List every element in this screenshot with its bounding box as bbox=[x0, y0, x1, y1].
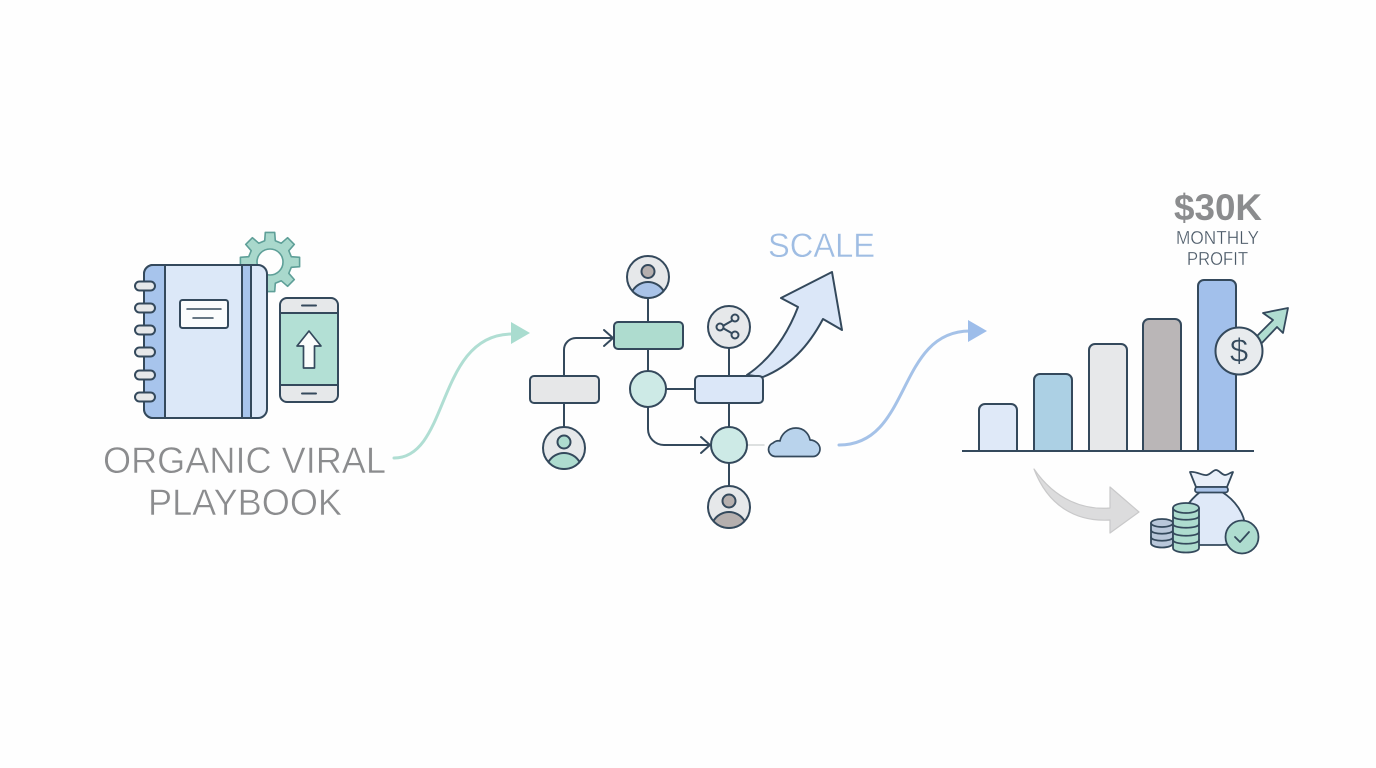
icon: user bottom bbox=[708, 486, 750, 528]
icon: phone with up arrow bbox=[280, 298, 338, 402]
bar 3 bbox=[1089, 344, 1127, 451]
heading: scale: SCALE bbox=[768, 227, 875, 265]
bar 2 bbox=[1034, 374, 1072, 451]
flowchart bbox=[530, 256, 842, 528]
notebook label bbox=[180, 300, 228, 328]
coin stack: small bbox=[1151, 519, 1173, 548]
title: organic viral playbook bbox=[103, 440, 386, 523]
icon: user left bbox=[543, 427, 585, 469]
title: organic viral playbook: PLAYBOOK bbox=[148, 482, 342, 523]
icon: growth arrow bbox=[1256, 308, 1288, 345]
icon: share bbox=[708, 306, 750, 348]
notebook spine bbox=[144, 265, 165, 418]
icon: user top bbox=[627, 256, 669, 298]
stat: 30K monthly profit: PROFIT bbox=[1187, 249, 1248, 269]
flow node: lower circle bbox=[711, 427, 747, 463]
coin stack: large bbox=[1173, 503, 1199, 552]
notebook strap bbox=[242, 265, 251, 418]
bar chart bbox=[962, 280, 1254, 451]
scale arrow bbox=[747, 272, 842, 377]
icon: dollar coin bbox=[1216, 328, 1262, 374]
icon: notebook bbox=[135, 265, 267, 418]
check badge bbox=[1226, 520, 1258, 554]
flow box: teal bbox=[614, 322, 683, 349]
flow box: blue bbox=[695, 376, 763, 403]
arrow: blue connector bbox=[839, 320, 987, 445]
arrow: grey curved bbox=[1034, 469, 1139, 533]
bar 4 bbox=[1143, 319, 1181, 451]
icon: dollar coin: $ bbox=[1230, 332, 1248, 369]
notebook cover bbox=[144, 265, 267, 418]
bar 1 bbox=[979, 404, 1017, 451]
chart baseline bbox=[962, 450, 1254, 452]
icon: gear bbox=[240, 232, 300, 292]
icon: money bag with coins bbox=[1151, 470, 1258, 554]
bar 5 bbox=[1198, 280, 1236, 451]
arrow: teal connector bbox=[394, 322, 530, 458]
stat: 30K monthly profit: MONTHLY bbox=[1176, 228, 1259, 248]
flow box: grey bbox=[530, 376, 599, 403]
stat: 30K monthly profit bbox=[1174, 187, 1262, 269]
title: organic viral playbook: ORGANIC VIRAL bbox=[103, 440, 386, 481]
icon: cloud bbox=[769, 428, 820, 456]
stat: 30K monthly profit: $30K bbox=[1174, 187, 1262, 228]
money bag bbox=[1176, 470, 1245, 545]
flow node: upper circle bbox=[630, 371, 666, 407]
notebook rings bbox=[135, 282, 155, 402]
flowchart connectors bbox=[564, 298, 764, 486]
